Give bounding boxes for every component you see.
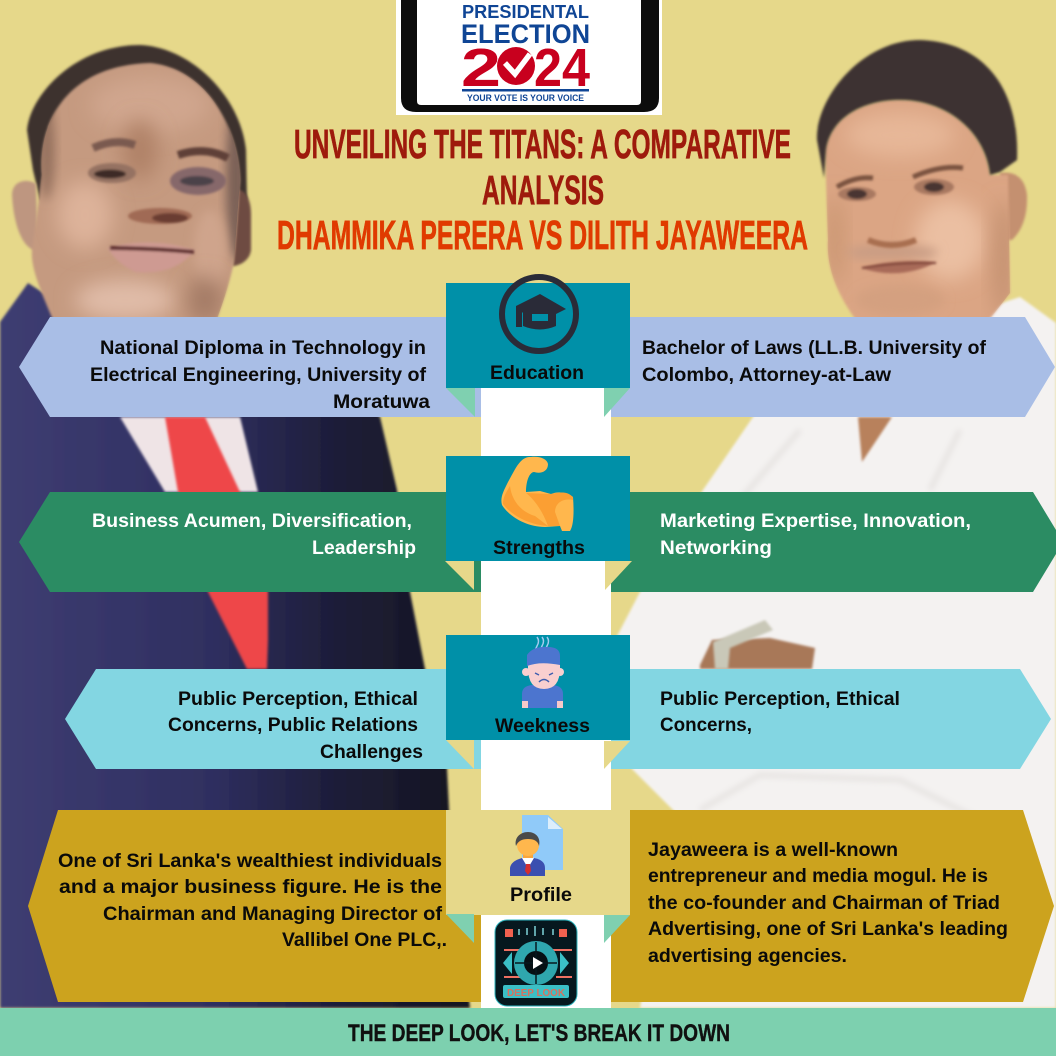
logo: presidential election 2024: 2 [461,38,501,98]
shirt folds [700,430,1000,830]
white centre column [481,388,611,1008]
right bar [611,810,1054,1002]
icon: graduation cap [502,277,576,351]
head [817,40,1027,325]
hair [817,40,1017,178]
left text: Chairman and Managing Director of [103,903,443,925]
logo: deep look [495,920,577,1006]
photo: Dhammika Perera [0,45,470,1008]
left text: and a major business figure. He is the [59,876,442,898]
label: Education [490,362,584,384]
row: education [19,277,1055,417]
logo: presidential election 2024: ELECTION [461,19,590,49]
right text: Concerns, [660,714,752,736]
left ear [12,181,38,250]
photo: Dilith Jayaweera [615,40,1056,1008]
icon: flexed arm [501,457,574,531]
logo: presidential election 2024: YOUR VOTE IS YOUR VOICE [467,93,584,104]
right text: Advertising, one of Sri Lanka's leading [648,918,1008,940]
face [825,100,1010,325]
right text [660,688,900,736]
left text: Vallibel One PLC,. [282,929,447,951]
row: strengths [19,456,1056,592]
right text [642,337,987,386]
watch [713,620,773,669]
right text: Marketing Expertise, Innovation, [660,510,971,532]
shirt [615,297,1056,1008]
label: Profile [510,884,572,906]
icon: sad person [522,637,564,708]
right text: Public Perception, Ethical [660,688,900,710]
right text: Networking [660,537,772,559]
right ear [232,190,251,266]
suit [0,283,470,1008]
right text [648,839,1008,967]
folds [446,740,630,769]
left text: Business Acumen, Diversification, [92,510,412,532]
right bar [611,669,1051,769]
left bar [28,810,481,1002]
right text: entrepreneur and media mogul. He is [648,865,988,887]
header box [446,283,630,388]
shirt [120,417,258,492]
title [277,121,808,258]
hair [27,45,247,200]
left bar [19,492,481,592]
right ear [1000,173,1027,240]
left text: Moratuwa [333,391,430,413]
left text: Leadership [312,537,416,559]
head [12,45,251,325]
left text: Public Perception, Ethical [178,688,418,710]
logo: presidential election 2024 [396,0,662,115]
footer band [0,1008,1056,1056]
left bar [19,317,481,417]
folds [446,914,630,943]
left text: One of Sri Lanka's wealthiest individuals [58,850,442,872]
right bar [611,317,1055,417]
right bar [611,492,1056,592]
label: Strengths [493,537,585,559]
label: Weekness [495,715,590,737]
open neck [858,417,892,462]
logo: presidential election 2024: 24 [534,38,590,98]
icon: profile document [510,815,563,876]
left text: Concerns, Public Relations [168,714,418,736]
row: profile [28,810,1054,1002]
row: weakness [65,635,1051,769]
folds [445,561,632,590]
right text [660,510,971,559]
folds [446,388,630,417]
logo: presidential election 2024: PRESIDENTAL [462,2,589,22]
logo: deep look: DEEP LOOK [507,988,566,999]
left text [168,688,423,763]
left text: Challenges [320,741,423,763]
right text: the co-founder and Chairman of Triad [648,892,1000,914]
brows, eyes, nose, mouth [837,167,963,273]
header box [446,635,630,740]
face [32,63,240,325]
right text: Bachelor of Laws (LL.B. University of [642,337,987,359]
brows, eyes, nose, mouth [88,142,228,273]
left bar [65,669,481,769]
right text: Colombo, Attorney-at-Law [642,364,892,386]
right text: Jayaweera is a well-known [648,839,898,861]
left text [58,850,447,951]
header box [446,456,630,561]
right text: advertising agencies. [648,945,847,967]
header box [446,810,630,915]
left text: Electrical Engineering, University of [90,364,426,386]
tie [165,417,268,669]
forearm and hand [700,638,815,669]
left text [90,337,430,413]
title: ANALYSIS [482,167,604,213]
left text [92,510,416,559]
left text: National Diploma in Technology in [100,337,426,359]
footer band: THE DEEP LOOK, LET'S BREAK IT DOWN [348,1020,730,1047]
